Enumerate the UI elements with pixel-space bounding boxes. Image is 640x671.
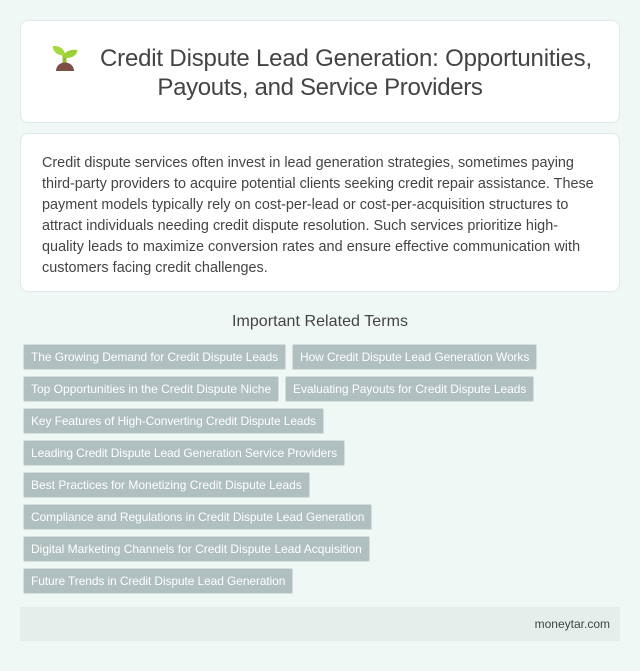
tag bbox=[23, 568, 293, 594]
tag bbox=[23, 472, 310, 498]
tag: The Growing Demand for Credit Dispute Leads bbox=[31, 350, 278, 364]
tag: Best Practices for Monetizing Credit Dispute Leads bbox=[31, 478, 302, 492]
tag bbox=[292, 344, 537, 370]
title: Credit Dispute Lead Generation: Opportunities, bbox=[100, 45, 592, 72]
tag bbox=[23, 344, 286, 370]
tag: Key Features of High-Converting Credit Dispute Leads bbox=[31, 414, 316, 428]
description text: payment models typically rely on cost-per-lead or cost-per-acquisition structures to bbox=[42, 197, 568, 213]
tag: Compliance and Regulations in Credit Dispute Lead Generation bbox=[31, 510, 364, 524]
related terms tags bbox=[23, 344, 537, 594]
header panel bbox=[20, 20, 620, 123]
footer bar bbox=[20, 607, 620, 641]
tag: Future Trends in Credit Dispute Lead Generation bbox=[31, 574, 285, 588]
tag bbox=[23, 536, 370, 562]
description text: third-party providers to acquire potential clients seeking credit repair assistance. These bbox=[42, 176, 594, 192]
description text bbox=[42, 155, 594, 276]
tag: Digital Marketing Channels for Credit Dispute Lead Acquisition bbox=[31, 542, 362, 556]
footer source text: moneytar.com bbox=[535, 617, 610, 631]
tag bbox=[23, 504, 372, 530]
description text: Credit dispute services often invest in lead generation strategies, sometimes paying bbox=[42, 155, 574, 171]
icon: seedling bbox=[52, 46, 78, 71]
description text: quality leads to maximize conversion rates and ensure effective communication with bbox=[42, 239, 580, 255]
tag bbox=[23, 376, 279, 402]
tag: How Credit Dispute Lead Generation Works bbox=[300, 350, 529, 364]
tag bbox=[23, 408, 324, 434]
tag: Leading Credit Dispute Lead Generation Service Providers bbox=[31, 446, 337, 460]
tag: Evaluating Payouts for Credit Dispute Leads bbox=[293, 382, 526, 396]
title: Payouts, and Service Providers bbox=[157, 74, 483, 101]
description panel bbox=[20, 133, 620, 292]
tag: Top Opportunities in the Credit Dispute Niche bbox=[31, 382, 271, 396]
title bbox=[100, 45, 592, 101]
description text: customers facing credit challenges. bbox=[42, 260, 268, 276]
description text: attract individuals needing credit dispute resolution. Such services prioritize high- bbox=[42, 218, 558, 234]
tag bbox=[285, 376, 534, 402]
tag bbox=[23, 440, 345, 466]
heading: important related terms: Important Related Terms bbox=[232, 313, 408, 330]
